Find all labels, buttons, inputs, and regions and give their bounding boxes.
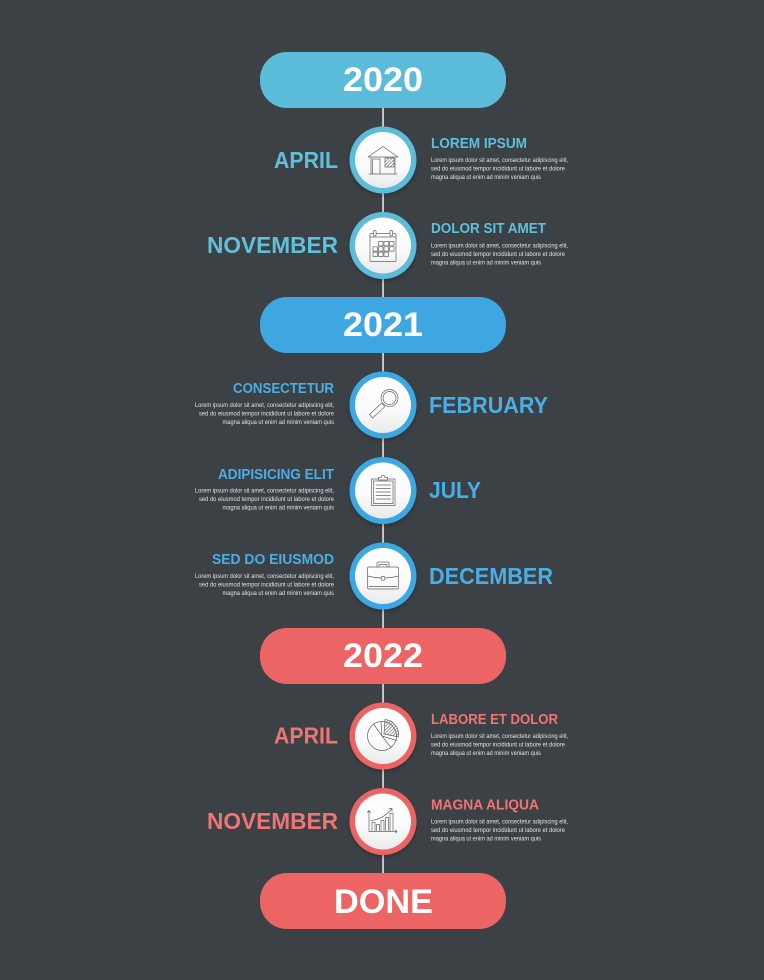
year pill: 2022 bbox=[260, 628, 506, 684]
description: sed do eiusmod tempor incididunt ut labore et dolore bbox=[431, 251, 565, 258]
end pill: done: DONE bbox=[334, 883, 433, 921]
milestone: February 2021 bbox=[195, 372, 548, 438]
month label: NOVEMBER bbox=[207, 232, 338, 258]
description: magna aliqua ut enim ad minim veniam quis bbox=[431, 750, 541, 757]
circle node bbox=[350, 788, 416, 855]
month label: JULY bbox=[429, 477, 481, 503]
heading: CONSECTETUR bbox=[233, 381, 334, 397]
description: magna aliqua ut enim ad minim veniam quis bbox=[431, 260, 541, 266]
year pill: 2022: 2022 bbox=[343, 637, 423, 675]
description: magna aliqua ut enim ad minim veniam quis bbox=[431, 836, 541, 842]
description bbox=[195, 573, 334, 597]
description: sed do eiusmod tempor incididunt ut labore et dolore bbox=[431, 166, 565, 172]
description: Lorem ipsum dolor sit amet, consectetur adipiscing elit, bbox=[195, 488, 334, 494]
year pill: 2020: 2020 bbox=[343, 61, 423, 99]
icon: magnifying glass bbox=[370, 390, 398, 418]
description: magna aliqua ut enim ad minim veniam quis bbox=[431, 174, 541, 181]
milestone: July 2021 bbox=[195, 457, 481, 524]
heading: ADIPISICING ELIT bbox=[218, 467, 334, 483]
year pill: 2021 bbox=[260, 297, 506, 353]
description bbox=[195, 488, 334, 512]
year pill: 2020 bbox=[260, 52, 506, 108]
end pill: done bbox=[260, 873, 506, 929]
milestone: April 2022 bbox=[274, 702, 568, 770]
vertical timeline line bbox=[382, 100, 384, 880]
heading: LABORE ET DOLOR bbox=[431, 712, 558, 728]
month label: APRIL bbox=[274, 147, 338, 173]
year pill: 2021: 2021 bbox=[343, 306, 423, 344]
circle node bbox=[350, 702, 416, 770]
icon: briefcase bbox=[368, 562, 398, 589]
milestone: April 2020 bbox=[274, 126, 568, 194]
description: Lorem ipsum dolor sit amet, consectetur adipiscing elit, bbox=[431, 157, 568, 164]
month label: APRIL bbox=[274, 722, 338, 748]
milestone: November 2022 bbox=[207, 788, 568, 855]
icon: house bbox=[368, 146, 398, 174]
heading: LOREM IPSUM bbox=[431, 136, 527, 152]
circle node bbox=[350, 372, 416, 438]
heading: SED DO EIUSMOD bbox=[212, 552, 334, 568]
circle node bbox=[350, 457, 416, 524]
heading: MAGNA ALIQUA bbox=[431, 798, 539, 814]
description: Lorem ipsum dolor sit amet, consectetur adipiscing elit, bbox=[431, 242, 568, 250]
description: Lorem ipsum dolor sit amet, consectetur adipiscing elit, bbox=[195, 402, 334, 409]
description bbox=[431, 242, 568, 266]
description: magna aliqua ut enim ad minim veniam quis bbox=[222, 504, 334, 512]
milestone: December 2021 bbox=[195, 542, 553, 610]
circle node bbox=[350, 126, 416, 194]
circle node bbox=[350, 542, 416, 610]
icon: growth chart bbox=[368, 808, 397, 833]
description: sed do eiusmod tempor incididunt ut labore et dolore bbox=[199, 496, 334, 503]
heading: DOLOR SIT AMET bbox=[431, 221, 546, 237]
month label: DECEMBER bbox=[429, 563, 553, 589]
description: Lorem ipsum dolor sit amet, consectetur adipiscing elit, bbox=[195, 573, 334, 580]
description bbox=[431, 157, 568, 181]
month label: NOVEMBER bbox=[207, 808, 338, 834]
description: magna aliqua ut enim ad minim veniam quis bbox=[222, 419, 334, 426]
description: sed do eiusmod tempor incididunt ut labore et dolore bbox=[431, 827, 565, 834]
description: sed do eiusmod tempor incididunt ut labore et dolore bbox=[199, 410, 334, 418]
icon: pie chart bbox=[368, 720, 399, 750]
description: sed do eiusmod tempor incididunt ut labore et dolore bbox=[199, 582, 334, 588]
description bbox=[195, 402, 334, 426]
circle node bbox=[350, 212, 416, 279]
description bbox=[431, 733, 568, 757]
description bbox=[431, 818, 568, 842]
icon: calendar bbox=[370, 230, 396, 262]
description: sed do eiusmod tempor incididunt ut labore et dolore bbox=[431, 742, 565, 748]
month label: FEBRUARY bbox=[429, 392, 548, 418]
description: Lorem ipsum dolor sit amet, consectetur adipiscing elit, bbox=[431, 818, 568, 826]
icon: clipboard bbox=[372, 476, 395, 506]
milestone: November 2020 bbox=[207, 212, 568, 279]
description: magna aliqua ut enim ad minim veniam quis bbox=[222, 590, 334, 597]
description: Lorem ipsum dolor sit amet, consectetur adipiscing elit, bbox=[431, 733, 568, 740]
